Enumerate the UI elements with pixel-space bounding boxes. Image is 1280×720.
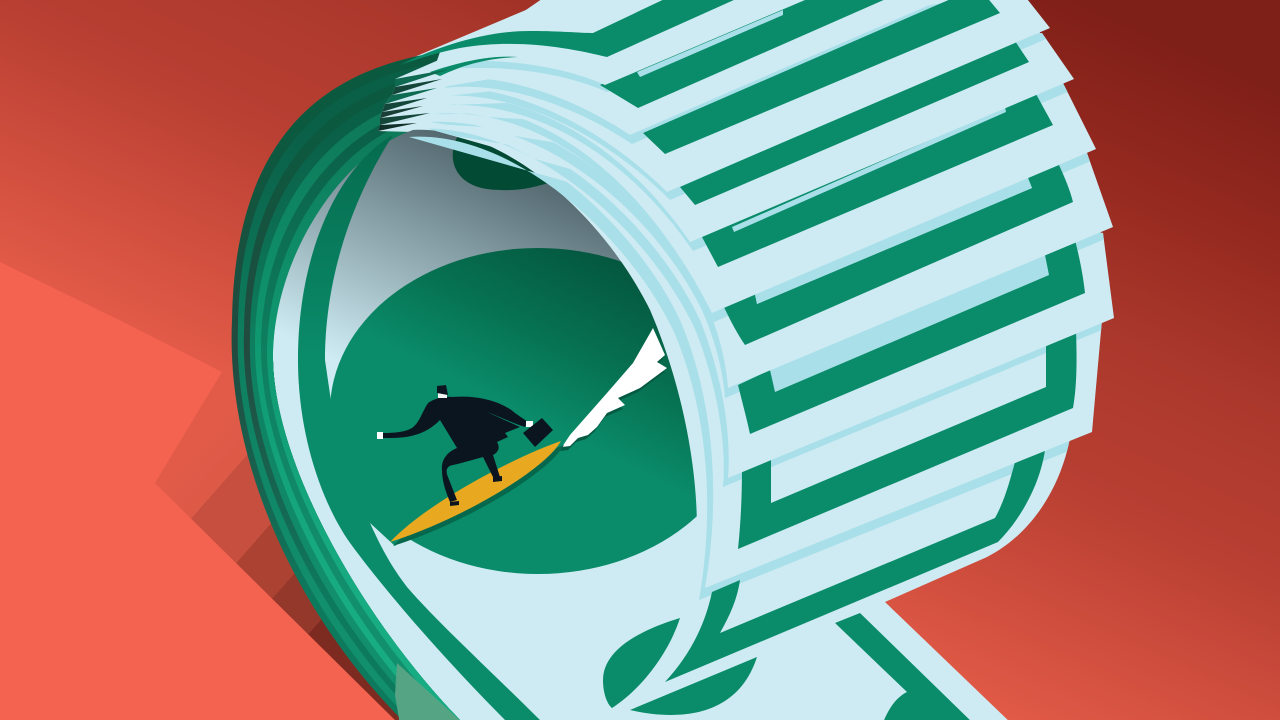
- white wave spray shadow: [560, 358, 664, 451]
- feet: [450, 476, 502, 506]
- corner leaf right: [630, 657, 757, 715]
- green border strip on left and bottom: [298, 135, 545, 720]
- white wave spray: [562, 328, 667, 447]
- sheet 1: [437, 0, 1050, 192]
- sheet 2: [452, 33, 1074, 242]
- lowest sheet border and shadow: [409, 137, 1096, 682]
- left hand: [377, 432, 383, 439]
- sheet 6: [413, 125, 1109, 588]
- bottom diagonal border: [835, 613, 975, 720]
- sheet 5: [417, 120, 1114, 478]
- sheet 3: [450, 84, 1096, 313]
- briefcase: [523, 418, 553, 447]
- surfboard: [390, 441, 561, 542]
- cast shadow of the roll: [155, 360, 420, 720]
- hair and glasses: [437, 385, 448, 395]
- top sheet with swoosh border: [400, 0, 810, 85]
- businessman body: [383, 397, 528, 502]
- sheet 4: [420, 92, 1113, 388]
- flat coral foreground: [0, 262, 400, 720]
- small back circle: [452, 137, 547, 190]
- pale paper fan at the stack end: [378, 55, 465, 132]
- banknote paper base: [260, 0, 1095, 720]
- stacked page edges: [232, 52, 465, 720]
- right hand: [526, 421, 533, 427]
- inner surface of the roll: [273, 130, 697, 574]
- large green circle: [330, 248, 697, 574]
- dark fringe spikes at the stack end: [378, 69, 450, 131]
- face: [438, 392, 447, 398]
- sheet 0: [442, 0, 960, 135]
- surfboard shadow: [393, 445, 564, 546]
- corner leaf left: [603, 618, 680, 708]
- surfer: [377, 385, 564, 546]
